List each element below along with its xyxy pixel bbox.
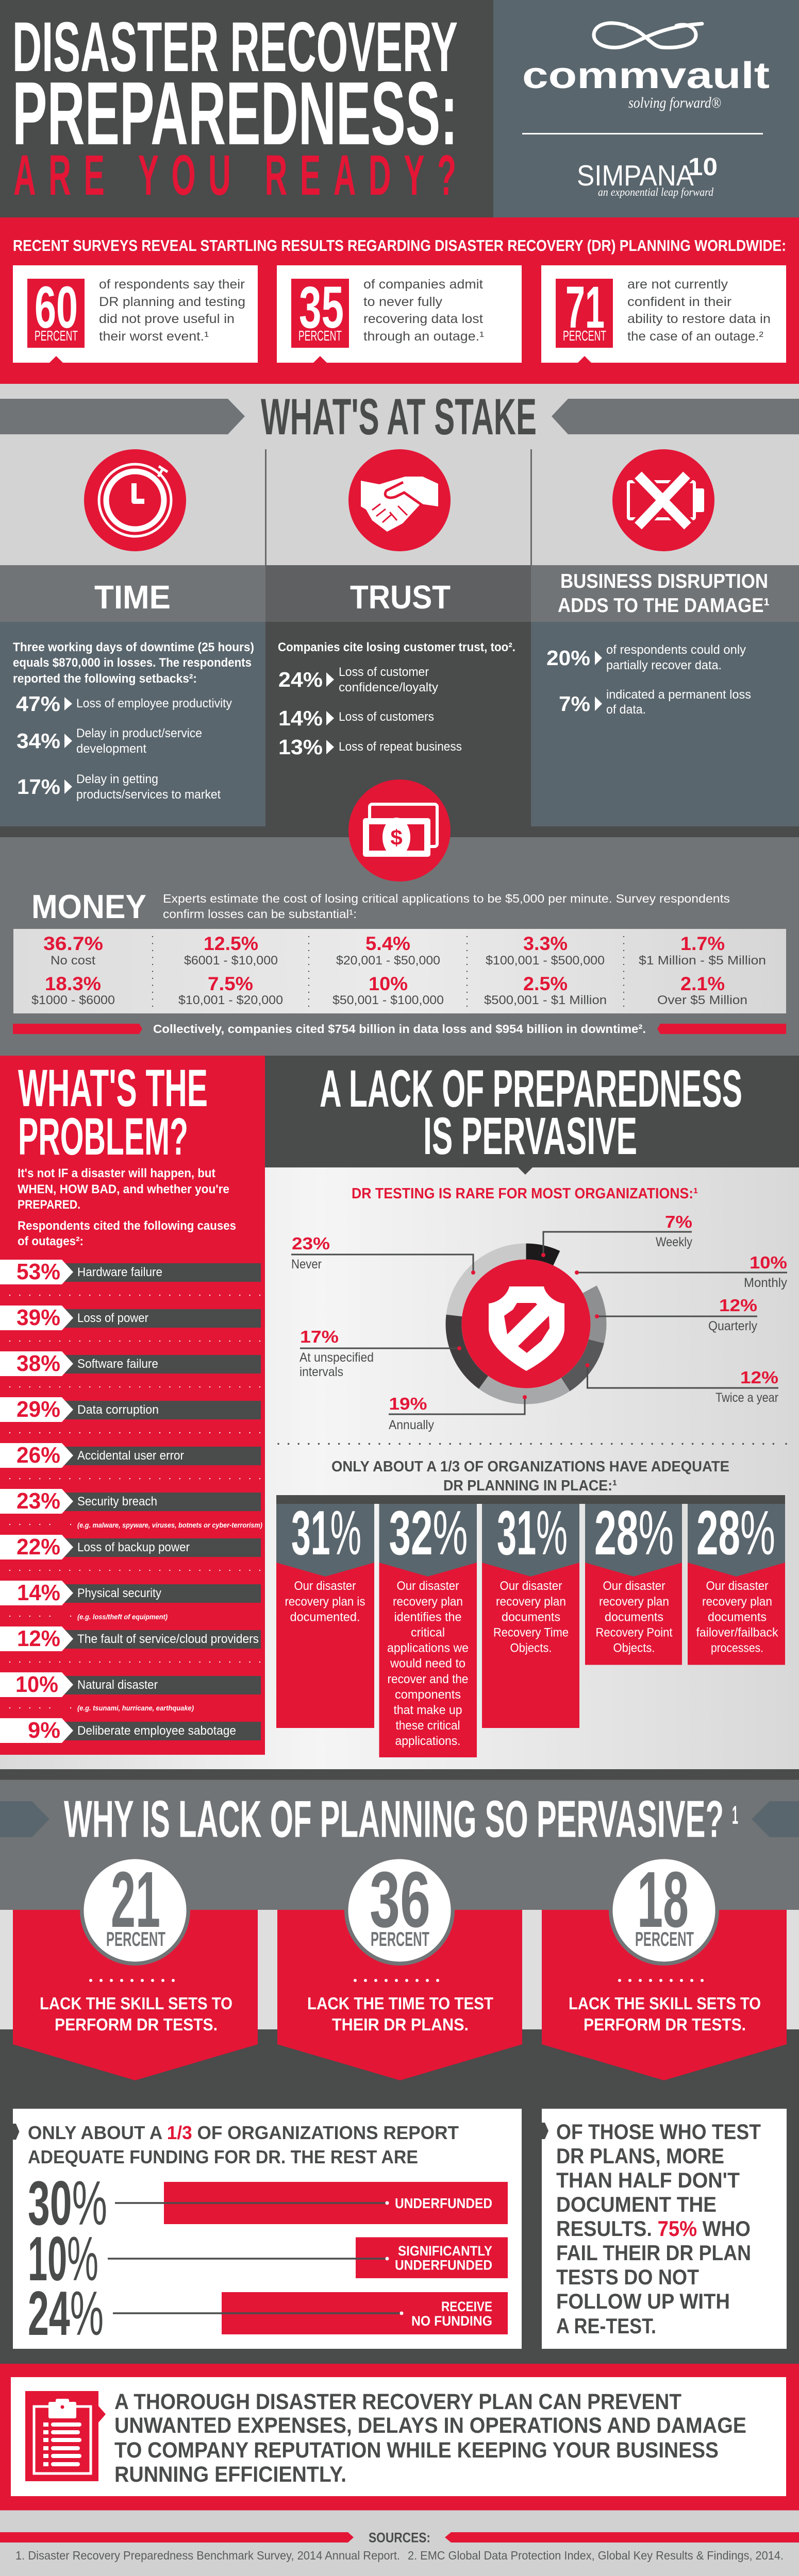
column: 31% recovery time: Our disaster bbox=[500, 1579, 562, 1593]
heading banner: what's at stake: WHAT'S AT STAKE bbox=[261, 388, 537, 445]
table: cost of losses: 36.7% bbox=[43, 933, 103, 954]
card: 35 percent: recovering data lost bbox=[363, 312, 483, 326]
title: DISASTER RECOVERY bbox=[12, 8, 458, 87]
heading: adequate DR planning: DR PLANNING IN PLACE:¹ bbox=[443, 1478, 617, 1494]
chart: planning columns bbox=[276, 1495, 785, 1757]
text: money intro: confirm losses can be substantial¹: bbox=[163, 907, 357, 921]
bar: 30% underfunded: 30% bbox=[28, 2168, 107, 2238]
banner: 21 percent: 21 bbox=[111, 1855, 160, 1944]
stat: 7%: indicated a permanent loss bbox=[606, 688, 751, 702]
panel: testing follow-up: A RE-TEST. bbox=[556, 2314, 656, 2338]
heading: DR testing: DR TESTING IS RARE FOR MOST ORGANIZATIONS:¹ bbox=[352, 1185, 698, 1202]
text: time intro bbox=[13, 640, 254, 686]
column: 32% critical applications: applications. bbox=[395, 1734, 461, 1748]
card: 60 percent: did not prove useful in bbox=[99, 312, 235, 326]
cause: 14% physical security bbox=[0, 1580, 261, 1621]
cause: 39% loss of power: 39% bbox=[16, 1305, 60, 1330]
callout: collective losses bbox=[13, 1022, 786, 1036]
banner: 18 percent: 18 bbox=[637, 1855, 689, 1944]
column: 31% recovery time: Recovery Time bbox=[493, 1626, 569, 1639]
heading banner: why: 1 bbox=[732, 1801, 738, 1829]
column: 28% failover bbox=[688, 1498, 785, 1665]
simpana logo text: 10 bbox=[688, 154, 718, 181]
card: 71 percent: are not currently bbox=[627, 277, 728, 292]
icon: banknotes bbox=[348, 779, 451, 882]
label: quarterly bbox=[595, 1296, 757, 1333]
cause: 9% employee sabotage bbox=[0, 1718, 261, 1743]
stat: 7%: 7% bbox=[559, 692, 590, 716]
heading: trust: TRUST bbox=[350, 579, 451, 616]
panel: testing follow-up: DOCUMENT THE bbox=[556, 2192, 717, 2216]
table: cost of losses: 5.4% bbox=[365, 933, 410, 954]
column: 31% recovery time: recovery plan bbox=[496, 1595, 566, 1608]
cause: 26% accidental user error: 26% bbox=[16, 1443, 60, 1468]
banner: 36 percent: THEIR DR PLANS. bbox=[332, 2015, 469, 2034]
panel: lack of preparedness heading: IS PERVASIVE bbox=[423, 1107, 637, 1165]
banner: 21 percent: PERCENT bbox=[106, 1928, 165, 1951]
banner: 36 percent: LACK THE TIME TO TEST bbox=[307, 1994, 493, 2013]
bar: 24% no funding bbox=[28, 2278, 508, 2348]
banner: 18 percent bbox=[542, 1855, 787, 2080]
label: monthly: Monthly bbox=[744, 1276, 787, 1290]
card: 35 percent: of companies admit bbox=[363, 277, 483, 292]
text: source list: 1. Disaster Recovery Preparedness Benchmark Survey, 2014 Annual Report. bbox=[15, 2549, 400, 2562]
column: 31% recovery time: 31% bbox=[497, 1498, 568, 1568]
card: 60 percent bbox=[13, 265, 258, 363]
stat: 24% bbox=[278, 665, 438, 694]
table: cost of losses: 1.7% bbox=[680, 933, 725, 954]
text: conclusion: TO COMPANY REPUTATION WHILE KEEPING YOUR BUSINESS bbox=[114, 2438, 719, 2463]
label: annually: 19% bbox=[389, 1394, 427, 1413]
card: 60 percent: of respondents say their bbox=[99, 277, 245, 292]
heading: business disruption bbox=[558, 570, 770, 617]
column: 32% critical applications: recover and the bbox=[388, 1672, 468, 1686]
panel: testing follow-up: DR PLANS, MORE bbox=[556, 2144, 724, 2168]
label: monthly: 10% bbox=[750, 1253, 787, 1272]
banner: 21 percent bbox=[13, 1855, 258, 2080]
banner: 21 percent: LACK THE SKILL SETS TO bbox=[40, 1994, 232, 2013]
stat: 24%: 24% bbox=[278, 668, 323, 691]
stat: 20% bbox=[546, 643, 746, 672]
panel: column headings bbox=[0, 565, 799, 622]
column: 31% documented: documented. bbox=[290, 1611, 360, 1624]
table: cost of losses: $100,001 - $500,000 bbox=[486, 954, 605, 968]
column: 31% documented: Our disaster bbox=[294, 1579, 356, 1593]
label: never bbox=[291, 1234, 475, 1275]
cause: 29% data corruption: Data corruption bbox=[77, 1403, 159, 1417]
text: time intro: reported the following setbacks²: bbox=[13, 672, 197, 686]
cause: 22% loss of backup power: Loss of backup power bbox=[77, 1540, 190, 1554]
cause: 22% loss of backup power: 22% bbox=[16, 1534, 60, 1560]
stat: 34%: 34% bbox=[16, 729, 60, 753]
panel: testing follow-up: FOLLOW UP WITH bbox=[556, 2289, 730, 2313]
stat: 47%: 47% bbox=[16, 692, 60, 716]
label: weekly: Weekly bbox=[656, 1235, 692, 1249]
column: 32% critical applications: that make up bbox=[394, 1703, 462, 1717]
heading banner: what's at stake bbox=[0, 388, 799, 445]
stat: 20%: of respondents could only bbox=[606, 643, 746, 657]
table: cost of losses: 3.3% bbox=[523, 933, 568, 954]
stat: 34%: Delay in product/service bbox=[76, 726, 202, 740]
panel: what's the problem bbox=[0, 1056, 265, 1755]
commvault logo text: solving forward® bbox=[628, 94, 721, 111]
icon: clipboard checklist bbox=[25, 2391, 106, 2481]
dotted separators bbox=[10, 1295, 263, 1708]
icon: commvault symbol bbox=[594, 23, 702, 47]
banner: 36 percent bbox=[277, 1855, 522, 2080]
icon: stopwatch bbox=[84, 449, 186, 551]
simpana logo text: an exponential leap forward bbox=[598, 185, 714, 198]
column: 28% failover: failover/failback bbox=[696, 1626, 778, 1639]
heading: funding: ADEQUATE FUNDING FOR DR. THE REST ARE bbox=[28, 2146, 418, 2167]
commvault logo text: commvault bbox=[522, 55, 770, 96]
title: ARE YOU READY? bbox=[13, 144, 456, 207]
card: 35 percent: through an outage.¹ bbox=[363, 329, 484, 344]
table: cost of losses: 2.5% bbox=[523, 973, 568, 994]
label: twice a year: 12% bbox=[740, 1368, 778, 1387]
card: 60 percent: DR planning and testing bbox=[99, 295, 245, 309]
text: problem intro: WHEN, HOW BAD, and whether you're bbox=[18, 1182, 229, 1196]
card: 71 percent: 71 bbox=[565, 275, 605, 341]
column: 32% critical applications: would need to bbox=[390, 1657, 465, 1670]
stat: 17% bbox=[17, 772, 221, 802]
text: time intro: Three working days of downtime (25 hours) bbox=[13, 640, 254, 654]
stat: 7%: of data. bbox=[606, 703, 646, 717]
text: conclusion bbox=[114, 2389, 746, 2487]
cause: 14% physical security: Physical security bbox=[77, 1586, 161, 1600]
panel: conclusion bbox=[0, 2364, 799, 2511]
banner: 36 percent: 36 bbox=[370, 1855, 430, 1944]
stat: 13%: Loss of repeat business bbox=[339, 740, 462, 754]
bar: 10% significantly underfunded: UNDERFUNDED bbox=[395, 2258, 492, 2273]
label: twice a year: Twice a year bbox=[715, 1391, 778, 1405]
stat: 20%: 20% bbox=[546, 646, 590, 670]
cause: 10% natural disaster: Natural disaster bbox=[77, 1678, 158, 1692]
cause: 38% software failure: Software failure bbox=[77, 1357, 158, 1371]
card: 60 percent: PERCENT bbox=[35, 328, 78, 344]
bar: 30% underfunded: UNDERFUNDED bbox=[395, 2195, 492, 2211]
cause: 12% service providers: The fault of service/cloud providers bbox=[77, 1632, 259, 1646]
cause: 14% physical security: 14% bbox=[17, 1580, 60, 1605]
title bbox=[12, 8, 458, 207]
heading: business disruption: BUSINESS DISRUPTION bbox=[560, 570, 768, 592]
label: quarterly: 12% bbox=[719, 1296, 757, 1315]
label: quarterly: Quarterly bbox=[708, 1319, 757, 1333]
panel: what's at stake bbox=[0, 384, 799, 565]
cause: 10% natural disaster: 10% bbox=[15, 1672, 58, 1697]
icon: banknotes: $ bbox=[390, 825, 403, 850]
card: 35 percent: PERCENT bbox=[298, 328, 342, 344]
column: 32% critical applications: these critical bbox=[396, 1719, 460, 1733]
stat: 47% bbox=[16, 692, 232, 716]
stat: 34%: development bbox=[76, 742, 146, 756]
icon: handshake bbox=[348, 449, 451, 551]
heading: what's the problem bbox=[18, 1059, 208, 1166]
text: problem intro: PREPARED. bbox=[18, 1198, 80, 1212]
panel: testing follow-up: THAN HALF DON'T bbox=[556, 2168, 740, 2192]
bar: 10% significantly underfunded: SIGNIFICANTLY bbox=[398, 2243, 492, 2259]
table: cost of losses: $1 Million - $5 Million bbox=[639, 954, 766, 968]
cause: 14% physical security: (e.g. loss/theft of equipment) bbox=[77, 1613, 168, 1621]
heading: funding bbox=[28, 2122, 459, 2167]
label: annually: Annually bbox=[389, 1418, 434, 1432]
table: cost of losses: 18.3% bbox=[45, 973, 101, 994]
label: unspecified intervals: 17% bbox=[300, 1327, 339, 1346]
cause: 53% hardware failure bbox=[0, 1259, 261, 1284]
cause: 38% software failure bbox=[0, 1351, 261, 1376]
banner: 18 percent: LACK THE SKILL SETS TO bbox=[569, 1994, 761, 2013]
text: problem intro bbox=[18, 1166, 236, 1248]
cause: 22% loss of backup power bbox=[0, 1534, 261, 1560]
cause: 23% security breach: Security breach bbox=[77, 1495, 157, 1509]
text: problem intro: It's not IF a disaster will happen, but bbox=[18, 1166, 215, 1180]
cause: 23% security breach: 23% bbox=[16, 1488, 60, 1514]
column: 32% critical applications: critical bbox=[411, 1626, 445, 1639]
panel: testing follow-up: RESULTS. 75% WHO bbox=[556, 2216, 751, 2241]
card: 60 percent: their worst event.¹ bbox=[99, 329, 209, 344]
table: cost of losses: $50,001 - $100,000 bbox=[332, 993, 444, 1007]
cause: 9% employee sabotage: 9% bbox=[28, 1718, 60, 1743]
heading: time: TIME bbox=[94, 579, 171, 616]
simpana logo text: SIMPANA bbox=[577, 159, 694, 192]
column: 32% critical applications bbox=[379, 1498, 477, 1757]
heading: funding: ONLY ABOUT A 1/3 OF ORGANIZATIONS REPORT bbox=[28, 2122, 459, 2143]
bar: 10% significantly underfunded bbox=[28, 2224, 508, 2294]
text: source list bbox=[15, 2549, 784, 2562]
stat: 17%: 17% bbox=[17, 775, 60, 799]
column: 31% recovery time bbox=[482, 1498, 579, 1728]
panel: time bbox=[0, 622, 265, 826]
text: problem intro: Respondents cited the following causes bbox=[18, 1219, 236, 1233]
heading: business disruption: ADDS TO THE DAMAGE¹ bbox=[558, 595, 770, 617]
heading: sources: SOURCES: bbox=[369, 2530, 430, 2545]
label: never: 23% bbox=[292, 1234, 330, 1253]
cause: 26% accidental user error bbox=[0, 1443, 261, 1468]
column: 32% critical applications: applications we bbox=[387, 1641, 469, 1655]
table: cost of losses: $20,001 - $50,000 bbox=[336, 954, 440, 968]
table: cost of losses: 2.1% bbox=[680, 973, 725, 994]
bar: 24% no funding: NO FUNDING bbox=[411, 2313, 492, 2329]
simpana logo text bbox=[577, 154, 718, 198]
cause: 53% hardware failure: 53% bbox=[16, 1259, 60, 1284]
card: 60 percent: 60 bbox=[35, 275, 78, 341]
header: logo panel bbox=[493, 0, 799, 217]
column: 32% critical applications: recovery plan bbox=[393, 1595, 463, 1608]
table: cost of losses: 7.5% bbox=[208, 973, 253, 994]
panel: trust bbox=[265, 622, 531, 837]
text: conclusion: UNWANTED EXPENSES, DELAYS IN OPERATIONS AND DAMAGE bbox=[114, 2413, 746, 2438]
card: 35 percent: 35 bbox=[299, 275, 344, 341]
cause: 23% security breach bbox=[0, 1488, 262, 1529]
card: 71 percent: ability to restore data in bbox=[627, 312, 771, 326]
bar: 10% significantly underfunded: 10% bbox=[28, 2224, 98, 2294]
cause: 26% accidental user error: Accidental user error bbox=[77, 1449, 184, 1463]
card: 71 percent: confident in their bbox=[627, 295, 731, 309]
text: money intro: Experts estimate the cost of losing critical applications to be $5,000 per minute. Survey respondents bbox=[163, 892, 730, 905]
stat: 7% bbox=[559, 688, 751, 717]
commvault logo text bbox=[522, 55, 770, 111]
text: conclusion: RUNNING EFFICIENTLY. bbox=[114, 2462, 346, 2487]
column: 31% documented bbox=[276, 1498, 374, 1728]
column: 31% documented: recovery plan is bbox=[285, 1595, 365, 1608]
label: monthly bbox=[575, 1253, 787, 1290]
heading: money: MONEY bbox=[31, 888, 146, 925]
column: 28% recovery point: Our disaster bbox=[603, 1579, 665, 1593]
panel: testing follow-up: OF THOSE WHO TEST bbox=[556, 2120, 761, 2144]
label: unspecified intervals bbox=[299, 1327, 461, 1379]
cause: 9% employee sabotage: Deliberate employee sabotage bbox=[77, 1724, 236, 1738]
text: problem intro: of outages²: bbox=[18, 1234, 84, 1248]
column: 28% failover: processes. bbox=[711, 1641, 763, 1655]
table: cost of losses: $500,001 - $1 Million bbox=[484, 993, 607, 1007]
panel: business disruption bbox=[531, 622, 799, 826]
column: 28% recovery point: Objects. bbox=[613, 1641, 655, 1655]
card: 35 percent: to never fully bbox=[363, 295, 443, 309]
text: money intro bbox=[163, 892, 730, 921]
heading: what's the problem: PROBLEM? bbox=[18, 1107, 188, 1166]
column: 31% recovery time: Objects. bbox=[510, 1641, 552, 1655]
panel: sources bbox=[0, 2510, 799, 2576]
label: weekly: 7% bbox=[665, 1212, 692, 1231]
stat: 47%: Loss of employee productivity bbox=[76, 697, 232, 710]
table: cost of losses: $10,001 - $20,000 bbox=[178, 993, 283, 1007]
bar: 24% no funding: 24% bbox=[28, 2278, 104, 2348]
stat: 13% bbox=[278, 735, 462, 759]
stat: 24%: Loss of customer bbox=[339, 665, 429, 679]
panel: testing follow-up bbox=[542, 2109, 787, 2349]
card: 71 percent: the case of an outage.² bbox=[627, 329, 763, 344]
column: 28% recovery point: Recovery Point bbox=[596, 1626, 673, 1639]
bar: 30% underfunded bbox=[28, 2168, 508, 2238]
heading: adequate DR planning bbox=[331, 1459, 729, 1494]
cause: 38% software failure: 38% bbox=[16, 1351, 60, 1376]
cause: 53% hardware failure: Hardware failure bbox=[77, 1265, 162, 1279]
header: title panel bbox=[0, 0, 493, 217]
label: unspecified intervals: At unspecified bbox=[299, 1350, 374, 1365]
column: 28% failover: Our disaster bbox=[706, 1579, 768, 1593]
cause: 12% service providers: 12% bbox=[17, 1626, 60, 1651]
column: 28% failover: recovery plan bbox=[702, 1595, 772, 1608]
column: 31% recovery time: documents bbox=[502, 1611, 560, 1624]
column: 32% critical applications: Our disaster bbox=[397, 1579, 459, 1593]
cause: 10% natural disaster bbox=[0, 1672, 261, 1712]
cause: 39% loss of power bbox=[0, 1305, 261, 1330]
column: 28% recovery point bbox=[585, 1498, 682, 1665]
label: twice a year bbox=[586, 1363, 778, 1405]
stat: 17%: Delay in getting bbox=[76, 772, 158, 786]
stat: 20%: partially recover data. bbox=[606, 658, 722, 672]
cause: 29% data corruption: 29% bbox=[16, 1397, 60, 1422]
callout: collective losses: Collectively, companies cited $754 billion in data loss and $954 billion in downtime². bbox=[153, 1022, 646, 1036]
stat: 13%: 13% bbox=[278, 735, 323, 759]
panel: lack of preparedness heading bbox=[265, 1056, 799, 1175]
column: 28% failover: 28% bbox=[696, 1498, 775, 1568]
column: 31% documented: 31% bbox=[291, 1498, 361, 1568]
table: cost of losses: 10% bbox=[369, 973, 408, 994]
heading: adequate DR planning: ONLY ABOUT A 1/3 OF ORGANIZATIONS HAVE ADEQUATE bbox=[331, 1459, 729, 1475]
stat: 17%: products/services to market bbox=[76, 788, 221, 802]
panel: why is lack of planning so pervasive bbox=[0, 1780, 799, 2364]
stat: 24%: confidence/loyalty bbox=[339, 681, 438, 694]
stat: 14% bbox=[278, 706, 434, 730]
panel: money bbox=[0, 779, 799, 1056]
panel: funding bbox=[13, 2109, 522, 2349]
text: conclusion: A THOROUGH DISASTER RECOVERY PLAN CAN PREVENT bbox=[114, 2389, 681, 2414]
table: cost of losses: Over $5 Million bbox=[657, 993, 747, 1007]
table: cost of losses bbox=[13, 929, 786, 1013]
cause: 12% service providers bbox=[0, 1626, 261, 1651]
column: 32% critical applications: 32% bbox=[389, 1498, 468, 1568]
panel: testing follow-up: TESTS DO NOT bbox=[556, 2265, 699, 2289]
card: 35 percent bbox=[277, 265, 522, 363]
stat: 34% bbox=[16, 726, 202, 756]
banner: 21 percent: PERFORM DR TESTS. bbox=[55, 2015, 218, 2034]
cause: 39% loss of power: Loss of power bbox=[77, 1311, 148, 1325]
table: cost of losses: No cost bbox=[51, 954, 95, 968]
label: never: Never bbox=[291, 1257, 322, 1272]
text: trust intro: Companies cite losing customer trust, too². bbox=[278, 640, 515, 654]
table: cost of losses: $1000 - $6000 bbox=[31, 993, 115, 1007]
card: 71 percent: PERCENT bbox=[563, 328, 606, 344]
table: cost of losses: $6001 - $10,000 bbox=[184, 954, 278, 968]
icon: crossed-out battery bbox=[612, 449, 714, 551]
column: 32% critical applications: components bbox=[395, 1688, 461, 1702]
stat: 14%: Loss of customers bbox=[339, 710, 434, 724]
title: PREPAREDNESS: bbox=[12, 63, 458, 163]
label: annually bbox=[389, 1394, 527, 1432]
banner: 18 percent: PERCENT bbox=[635, 1928, 694, 1951]
text: time intro: equals $870,000 in losses. The respondents bbox=[13, 656, 252, 670]
bar: 24% no funding: RECEIVE bbox=[441, 2299, 492, 2314]
banner: 18 percent: PERFORM DR TESTS. bbox=[584, 2015, 746, 2034]
panel: survey results bbox=[0, 217, 799, 384]
banner: 36 percent: PERCENT bbox=[371, 1928, 429, 1951]
text: source list: 2. EMC Global Data Protection Index, Global Key Results & Findings, 2014. bbox=[408, 2549, 784, 2562]
column: 28% failover: documents bbox=[708, 1611, 767, 1624]
cause: 23% security breach: (e.g. malware, spyware, viruses, botnets or cyber-terrorism) bbox=[77, 1521, 262, 1529]
icon: shield bbox=[489, 1286, 564, 1371]
label: weekly bbox=[541, 1212, 692, 1257]
card: 71 percent bbox=[541, 265, 786, 363]
panel: testing follow-up: FAIL THEIR DR PLAN bbox=[556, 2241, 751, 2265]
column: 28% recovery point: documents bbox=[605, 1611, 663, 1624]
heading: what's the problem: WHAT'S THE bbox=[18, 1059, 208, 1117]
cause: 10% natural disaster: (e.g. tsunami, hurricane, earthquake) bbox=[77, 1704, 194, 1712]
column: 32% critical applications: identifies the bbox=[394, 1611, 462, 1624]
table: cost of losses: 12.5% bbox=[204, 933, 258, 954]
stat: 14%: 14% bbox=[278, 706, 323, 730]
column: 28% recovery point: 28% bbox=[594, 1498, 674, 1568]
label: unspecified intervals: intervals bbox=[299, 1365, 343, 1379]
donut chart: testing frequency bbox=[291, 1212, 787, 1432]
column: 28% recovery point: recovery plan bbox=[599, 1595, 669, 1608]
cause: 29% data corruption bbox=[0, 1397, 261, 1422]
